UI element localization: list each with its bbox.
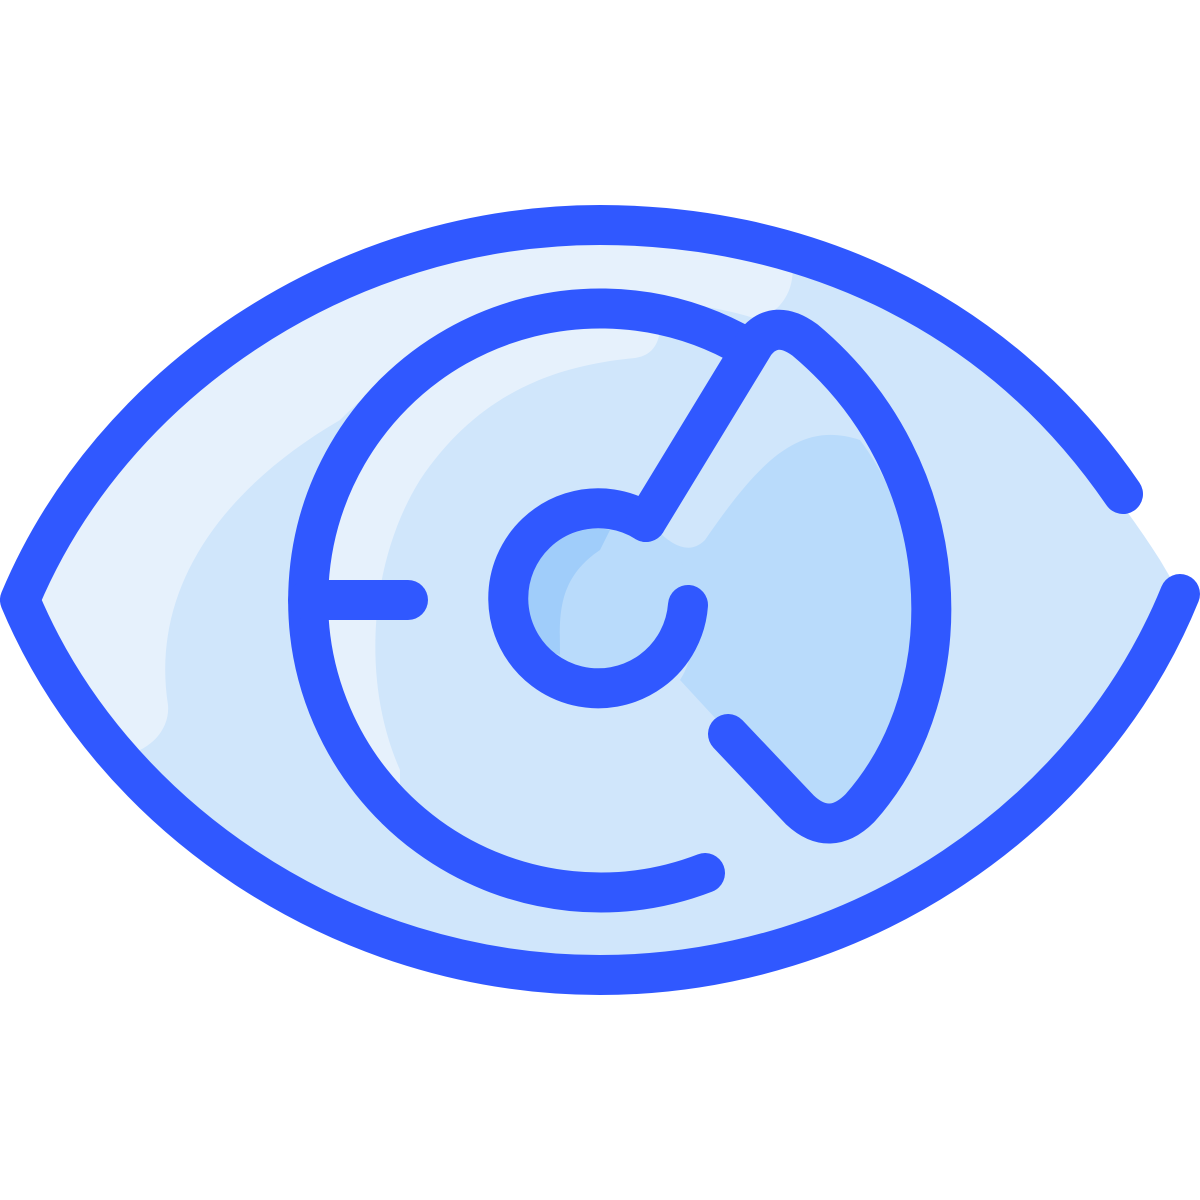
pupil arc (508, 508, 688, 688)
eye outline (20, 225, 1180, 975)
iris tick (308, 580, 408, 620)
iris wedge (646, 330, 931, 824)
iris shaded segment (510, 435, 918, 824)
iris arc (308, 308, 736, 892)
eye fill (20, 225, 1180, 975)
